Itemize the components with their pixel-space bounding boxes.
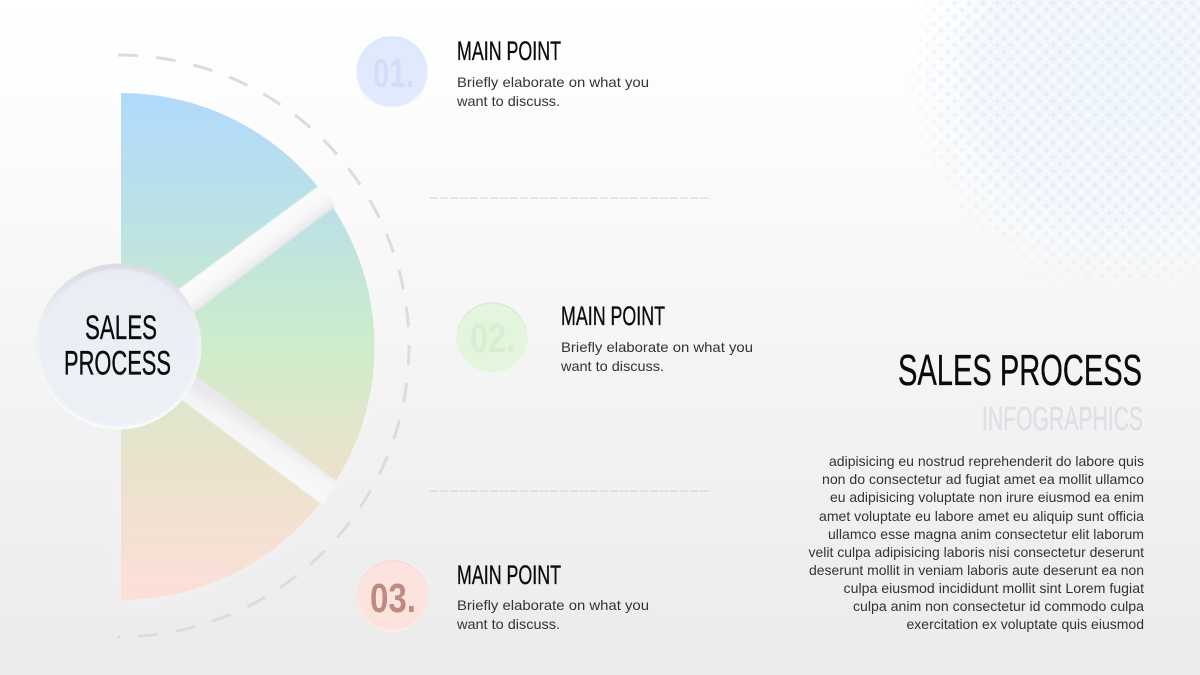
badge 03: 03. xyxy=(370,575,416,621)
badge 01 xyxy=(357,37,427,107)
spoke: lower divider xyxy=(178,373,337,504)
description paragraph: ullamco esse magna anim consectetur elit laborum xyxy=(828,526,1144,542)
description paragraph xyxy=(808,453,1144,632)
center hub xyxy=(36,264,202,430)
text 01 xyxy=(456,74,649,109)
text 02: Briefly elaborate on what you xyxy=(561,339,753,355)
description paragraph: velit culpa adipisicing laboris nisi consectetur deserunt xyxy=(808,544,1144,560)
heading 01: MAIN POINT xyxy=(457,36,561,66)
wedge halo xyxy=(121,85,367,608)
gradient wedge xyxy=(121,93,374,600)
main point 01 xyxy=(357,36,649,109)
halftone decoration xyxy=(925,0,1200,270)
hub label: PROCESS xyxy=(64,344,171,382)
description paragraph: culpa anim non consectetur id commodo culpa xyxy=(853,598,1144,614)
badge 01: 01. xyxy=(373,50,414,96)
description paragraph: deserunt mollit in veniam laboris aute deserunt ea non xyxy=(809,562,1144,578)
semicircle diagram xyxy=(36,85,374,608)
main point 03 xyxy=(358,560,649,632)
heading 03: MAIN POINT xyxy=(457,560,561,590)
description paragraph: exercitation ex voluptate quis eiusmod xyxy=(906,616,1144,632)
main point 02 xyxy=(457,301,753,374)
badge 03 xyxy=(358,561,428,631)
text 03 xyxy=(456,597,649,632)
spoke: upper divider xyxy=(175,186,335,314)
description paragraph: adipisicing eu nostrud reprehenderit do labore quis xyxy=(829,453,1144,469)
text 01: Briefly elaborate on what you xyxy=(457,74,649,90)
heading 02: MAIN POINT xyxy=(561,301,665,331)
text 02: want to discuss. xyxy=(560,358,664,374)
dashed outer arc xyxy=(118,55,409,637)
text 02 xyxy=(560,339,753,374)
description paragraph: amet voluptate eu labore amet eu aliquip sunt officia xyxy=(819,508,1144,524)
text 03: Briefly elaborate on what you xyxy=(457,597,649,613)
text 01: want to discuss. xyxy=(456,93,560,109)
hub label xyxy=(64,309,171,382)
text 03: want to discuss. xyxy=(456,616,560,632)
badge 02: 02. xyxy=(470,315,515,361)
description paragraph: culpa eiusmod incididunt mollit sint Lorem fugiat xyxy=(844,580,1144,596)
description paragraph: non do consectetur ad fugiat amet ea mollit ullamco xyxy=(822,471,1144,487)
badge 02 xyxy=(457,303,527,373)
hub label: SALES xyxy=(85,309,157,347)
description paragraph: eu adipisicing voluptate non irure eiusmod ea enim xyxy=(830,489,1144,505)
